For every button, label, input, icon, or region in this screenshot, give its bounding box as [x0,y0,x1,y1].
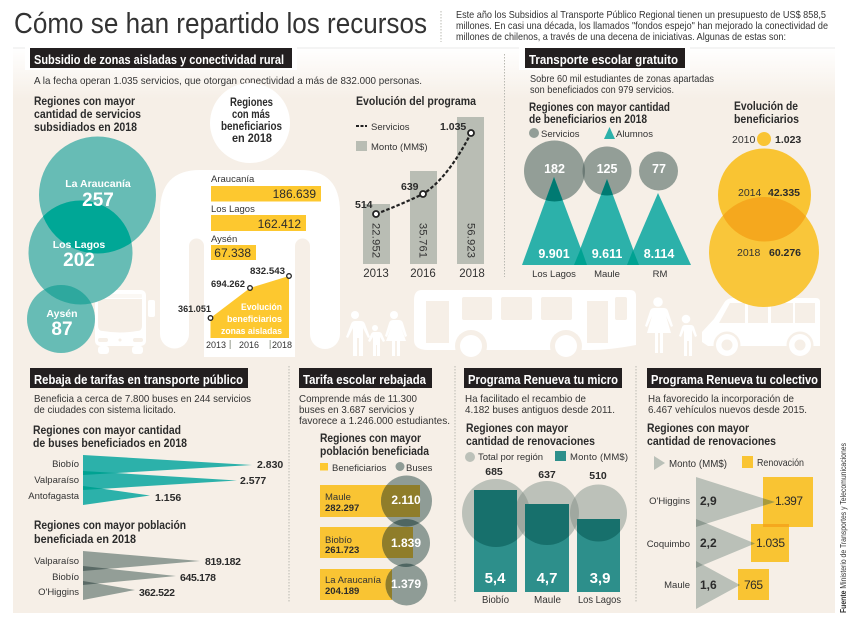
chart: servicios y alumnos por región: 182 [544,162,565,176]
chart: beneficiarios y buses por región: 204.189 [325,586,359,597]
chart: buses beneficiados: Valparaíso [34,475,79,486]
chart: renovaciones y monto por región: 510 [589,470,607,482]
intro: tarifa escolar: Comprende más de 11.300 [299,393,417,405]
chart: servicios y alumnos por región: 9.611 [592,247,622,261]
subheading: regiones mayor cantidad de beneficiarios: Regiones con mayor cantidad [529,100,670,114]
intro: transporte escolar [530,73,714,96]
legend: beneficiarios y buses: Beneficiarios [332,463,387,474]
intro: transporte escolar: son beneficiados con 979 servicios. [530,84,674,96]
bar chart: beneficiarios por región: Araucanía [211,174,255,185]
chart: buses beneficiados: Antofagasta [28,491,80,502]
chart: renovaciones y monto por región: 5,4 [485,570,506,587]
subheading: población beneficiada [320,431,429,458]
heading: regiones con más beneficiarios: Regiones [230,95,273,109]
icon: van [702,298,820,358]
chart: monto y renovación por región: Coquimbo [647,539,690,550]
chart: población beneficiada: 645.178 [180,572,216,584]
area chart: evolución beneficiarios zonas aisladas: 2018 [272,340,292,350]
area chart: evolución beneficiarios zonas aisladas [178,266,292,350]
chart: evolución de beneficiarios: beneficiarios [734,112,799,126]
chart: monto y renovación por región: Maule [664,580,690,591]
chart: renovaciones y monto por región: 3,9 [590,570,610,587]
subheading: renovaciones: Regiones con mayor [466,421,568,435]
bubble chart: servicios por región: 87 [51,319,73,340]
panel: programa renueva tu colectivo [647,368,821,609]
bar chart: beneficiarios por región [211,174,321,260]
area chart: evolución beneficiarios zonas aisladas: Evolución [241,302,282,313]
area chart: evolución beneficiarios zonas aisladas: 2013 [206,340,226,350]
chart: beneficiarios y buses por región: 261.723 [325,545,359,556]
heading: regiones con más beneficiarios: con más [232,107,270,121]
intro: renueva tu colectivo: Ha favorecido la incorporación de [648,393,794,405]
subheading: regiones con mayor cantidad de servicios: Regiones con mayor [34,94,135,108]
chart: monto y renovación por región: 1,6 [700,578,717,592]
heading: tarifa escolar: Tarifa escolar rebajada [303,372,427,387]
intro: rebaja de tarifas: Beneficia a cerca de 7.800 buses en 244 servicios [34,393,251,405]
heading: renueva tu micro: Programa Renueva tu micro [468,372,618,387]
subheading: población beneficiada [34,518,186,546]
chart: beneficiarios y buses por región: 1.379 [391,577,421,591]
chart: población beneficiada: O'Higgins [38,587,79,598]
intro: tarifa escolar [299,393,450,427]
chart: beneficiarios y buses por región: 282.297 [325,503,359,514]
chart: evolución de beneficiarios [709,99,819,307]
icon: family [346,311,407,356]
bubble chart: servicios por región: 257 [82,190,114,211]
intro: tarifa escolar: favorece a 1.246.000 estudiantes. [299,415,450,427]
chart: evolución del programa: 2013 [363,268,389,280]
header intro text [456,9,828,43]
chart: monto y renovación por región: 765 [744,578,763,592]
heading: renueva tu colectivo [647,368,821,388]
intro: renueva tu micro: Ha facilitado el recambio de [465,393,586,405]
chart: servicios y alumnos por región: 125 [597,162,617,176]
chart: evolución del programa: 2016 [410,268,436,280]
legend: total y monto: Monto (MM$) [570,452,628,463]
panel: programa renueva tu micro [462,368,628,606]
panel: rebaja de tarifas [28,368,283,600]
panel: transporte escolar gratuito [519,46,819,307]
area chart: evolución beneficiarios zonas aisladas: beneficiarios [227,314,282,325]
chart: buses beneficiados [28,455,283,505]
chart: servicios y alumnos por región: 8.114 [644,247,674,261]
chart: población beneficiada: Biobío [52,572,79,583]
legend: total y monto: Total por región [478,452,543,463]
bubble chart: servicios por región: La Araucanía [65,178,131,190]
bubble chart: servicios por región [27,136,156,353]
bar chart: beneficiarios por región: 67.338 [214,246,251,260]
subheading: regiones mayor cantidad de beneficiarios [529,100,670,126]
bar chart: beneficiarios por región: Aysén [211,234,237,245]
chart: población beneficiada: 362.522 [139,587,175,599]
chart: evolución del programa: 56.923 [464,223,476,258]
chart: beneficiarios y buses por región [320,476,432,606]
chart: evolución del programa: 639 [401,181,419,193]
chart: servicios y alumnos por región: Maule [594,269,620,280]
bubble chart: servicios por región: Los Lagos [53,239,105,251]
intro: subsidio: A la fecha operan 1.035 servicios, que otorgan conectividad a más de 832.000 personas. [34,75,422,87]
bar chart: beneficiarios por región: Los Lagos [211,204,255,215]
subheading: población beneficiada: beneficiada en 2018 [34,532,136,546]
intro: tarifa escolar: buses en 3.687 servicios y [299,404,415,416]
chart: renovaciones y monto por región: Los Lagos [578,594,621,606]
intro: transporte escolar: Sobre 60 mil estudiantes de zonas apartadas [530,73,714,85]
chart: evolución del programa: Monto (MM$) [371,142,427,153]
heading: rebaja de tarifas: Rebaja de tarifas en transporte público [34,372,243,387]
bubble chart: servicios por región: 202 [63,250,95,271]
chart: monto y renovación por región: 2,2 [700,536,717,550]
chart: evolución de beneficiarios: 2018 [737,247,761,259]
subheading: población beneficiada: Regiones con mayor población [34,518,186,532]
intro: renueva tu micro [465,393,615,416]
header intro text: millones de chilenos, a través de una decena de iniciativas. Algunas de estas son: [456,31,786,43]
chart: renovaciones y monto por región: Biobío [482,594,509,606]
chart: renovaciones y monto por región: 685 [485,466,503,478]
chart: evolución del programa: 35.761 [416,223,428,258]
chart: evolución de beneficiarios: 2014 [738,187,762,199]
chart: buses beneficiados: 2.830 [257,459,283,471]
chart: servicios y alumnos por región: Los Lagos [532,269,576,280]
chart: monto y renovación por región: 1.397 [775,494,803,508]
intro: rebaja de tarifas: de ciudades con sistema licitado. [34,404,176,416]
heading: renueva tu colectivo: Programa Renueva tu colectivo [651,372,818,387]
heading: regiones con más beneficiarios [221,95,282,145]
area chart: evolución beneficiarios zonas aisladas: zonas aisladas [221,326,282,337]
chart: evolución del programa: 1.035 [440,121,466,133]
chart: servicios y alumnos por región: 77 [652,162,666,176]
heading: rebaja de tarifas [30,368,248,388]
heading: transporte escolar [525,48,685,68]
chart: evolución del programa: 2018 [459,268,485,280]
chart: evolución del programa: 22.952 [370,223,382,258]
intro: renueva tu colectivo: 6.467 vehículos nuevos desde 2015. [648,404,807,416]
intro: renueva tu colectivo [648,393,807,416]
subheading: buses beneficiados [33,423,187,450]
panel: tarifa escolar rebajada [299,368,450,606]
subheading: población beneficiada: población beneficiada [320,444,429,458]
legend: monto y renovación: Renovación [757,457,804,469]
heading: regiones con más beneficiarios: en 2018 [232,131,272,145]
chart: evolución del programa [355,94,485,280]
chart: renovaciones y monto por región: Maule [534,594,561,606]
chart: evolución del programa: 514 [355,199,373,211]
icon: white person silhouette with head [160,83,340,357]
bar chart: beneficiarios por región: 162.412 [258,217,301,231]
chart: servicios y alumnos por región: RM [653,269,667,280]
heading: transporte escolar: Transporte escolar gratuito [529,52,678,67]
chart: monto y renovación por región: 2,9 [700,494,717,508]
chart: evolución de beneficiarios: 42.335 [768,187,800,199]
source note: Fuente Ministerio de Transportes y Telecomunicaciones [839,443,848,613]
chart: renovaciones y monto por región: 4,7 [537,570,557,587]
area chart: evolución beneficiarios zonas aisladas: 694.262 [211,279,245,290]
subheading: renovaciones [466,421,595,448]
chart: población beneficiada: 819.182 [205,556,241,568]
subheading: regiones mayor cantidad de beneficiarios: de beneficiarios en 2018 [529,112,647,126]
chart: monto y renovación por región: 1.035 [756,536,785,550]
chart: buses beneficiados: 2.577 [240,475,266,487]
chart: evolución de beneficiarios: 2010 [732,134,756,146]
subheading: buses beneficiados: Regiones con mayor cantidad [33,423,181,437]
chart: renovaciones y monto por región [462,466,627,606]
chart: beneficiarios y buses por región: 2.110 [391,493,421,507]
subheading: renovaciones [647,421,776,448]
legend: servicios y alumnos: Alumnos [616,129,653,140]
heading: subsidio [30,48,292,68]
subheading: regiones con mayor cantidad de servicios [34,94,141,134]
heading: subsidio: Subsidio de zonas aisladas y conectividad rural [34,52,284,67]
title: Cómo se han repartido los recursos [14,8,427,40]
legend: beneficiarios y buses: Buses [406,463,433,474]
chart: monto y renovación por región [647,477,813,609]
heading: regiones con más beneficiarios: beneficiarios [221,119,282,133]
subheading: renovaciones: Regiones con mayor [647,421,749,435]
legend: servicios y alumnos [529,127,653,140]
heading: tarifa escolar [299,368,432,388]
chart: evolución de beneficiarios: 1.023 [775,134,801,146]
chart: evolución del programa: Servicios [371,122,410,133]
chart: servicios y alumnos por región: 9.901 [538,247,570,261]
bar chart: beneficiarios por región: 186.639 [273,187,316,201]
chart: buses beneficiados: 1.156 [155,492,181,504]
chart: beneficiarios y buses por región: Maule [325,492,351,503]
subheading: renovaciones: cantidad de renovaciones [466,434,595,448]
chart: buses beneficiados: Biobío [52,459,79,470]
subheading: renovaciones: cantidad de renovaciones [647,434,776,448]
legend: monto y renovación: Monto (MM$) [669,458,727,470]
icon: woman and child [645,297,697,356]
area chart: evolución beneficiarios zonas aisladas: 832.543 [250,266,285,277]
subheading: población beneficiada: Regiones con mayor [320,431,421,445]
icon: large bus [414,290,636,362]
legend: beneficiarios y buses [320,462,433,474]
chart: beneficiarios y buses por región: 1.839 [391,536,421,550]
chart: beneficiarios y buses por región: Biobío [325,535,352,546]
chart: población beneficiada: Valparaíso [34,556,79,567]
intro: renueva tu micro: 4.182 buses antiguos desde 2011. [465,404,615,416]
chart: población beneficiada [34,551,241,600]
subheading: regiones con mayor cantidad de servicios: subsidiados en 2018 [34,120,137,134]
chart: monto y renovación por región: O'Higgins [649,496,690,507]
chart: servicios y alumnos por región [522,140,691,280]
chart: evolución de beneficiarios: 60.276 [769,247,801,259]
heading: renueva tu micro [464,368,622,388]
legend: monto y renovación [654,456,804,470]
legend: servicios y alumnos: Servicios [541,129,580,140]
area chart: evolución beneficiarios zonas aisladas: 361.051 [178,304,212,315]
area chart: evolución beneficiarios zonas aisladas: 2016 [239,340,259,350]
chart: evolución de beneficiarios: Evolución de [734,99,798,113]
subheading: regiones con mayor cantidad de servicios: cantidad de servicios [34,107,141,121]
legend: total y monto [465,451,628,463]
chart: renovaciones y monto por región: 637 [538,469,556,481]
chart: evolución del programa: Evolución del programa [356,94,476,108]
chart: beneficiarios y buses por región: La Araucanía [325,575,382,586]
icon: front bus [85,290,155,354]
bubble chart: servicios por región: Aysén [46,308,78,320]
subheading: buses beneficiados: de buses beneficiados en 2018 [33,436,187,450]
intro: rebaja de tarifas [34,393,251,416]
